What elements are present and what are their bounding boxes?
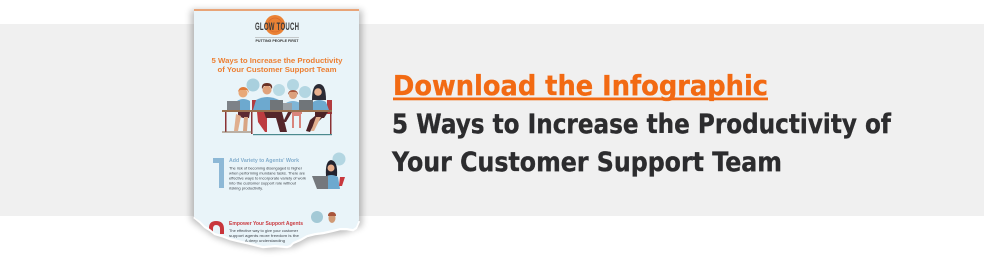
section 1 body: into the customer support role without	[229, 180, 297, 186]
section 1 body: effective ways to incorporate variety of work	[229, 176, 306, 180]
lower bodies	[238, 112, 250, 118]
desk	[222, 110, 332, 112]
agent with laptop	[312, 152, 346, 189]
section 2 body: A deep understanding	[245, 238, 285, 243]
section 2 body: support agents more freedom is the	[229, 233, 300, 238]
sheet title	[212, 58, 342, 74]
section 2	[209, 211, 336, 243]
section 1 body: when performing mundane tasks. There are	[229, 170, 306, 176]
subtitle: 5 Ways to Increase the Productivity of	[392, 109, 891, 140]
sheet title: 5 Ways to Increase the Productivity	[212, 56, 343, 65]
section 2 body	[229, 230, 299, 243]
laptops	[227, 101, 240, 110]
logo: GLOW TOUCH	[255, 20, 299, 32]
agent 4	[312, 84, 326, 100]
section 1 body	[229, 166, 306, 190]
section 2 heading: Empower Your Support Agents	[229, 221, 303, 227]
background band	[0, 24, 984, 216]
section 1 body: The risk of becoming disengaged is higher	[229, 166, 303, 170]
desk legs	[225, 112, 226, 132]
section 1 body: risking productivity.	[229, 186, 263, 190]
chairs backs	[252, 100, 256, 110]
sheet top bar	[194, 9, 359, 11]
section 2 body: The effective way to give your customer	[229, 228, 299, 233]
sheet title: of Your Customer Support Team	[218, 65, 337, 74]
illustration: team at desk	[222, 78, 332, 135]
speech bubbles	[246, 78, 260, 92]
subtitle: Your Customer Support Team	[391, 147, 782, 178]
section 2 icons	[311, 211, 323, 223]
logo: PUTTING PEOPLE FIRST	[256, 39, 299, 43]
download link: Download the Infographic	[393, 70, 768, 102]
section 1	[213, 152, 346, 190]
agent 2	[262, 86, 272, 94]
agent 3	[289, 92, 297, 99]
floor lines	[222, 132, 252, 133]
numeral 1	[213, 158, 224, 188]
torn paper edge	[194, 217, 359, 247]
section 1 heading: Add Variety to Agents' Work	[229, 158, 300, 164]
subtitle	[391, 109, 891, 178]
numeral 2	[209, 221, 224, 234]
agent 1	[238, 90, 248, 98]
infographic preview sheet	[194, 9, 359, 249]
sheet shadow	[191, 10, 362, 250]
logo	[255, 15, 299, 43]
